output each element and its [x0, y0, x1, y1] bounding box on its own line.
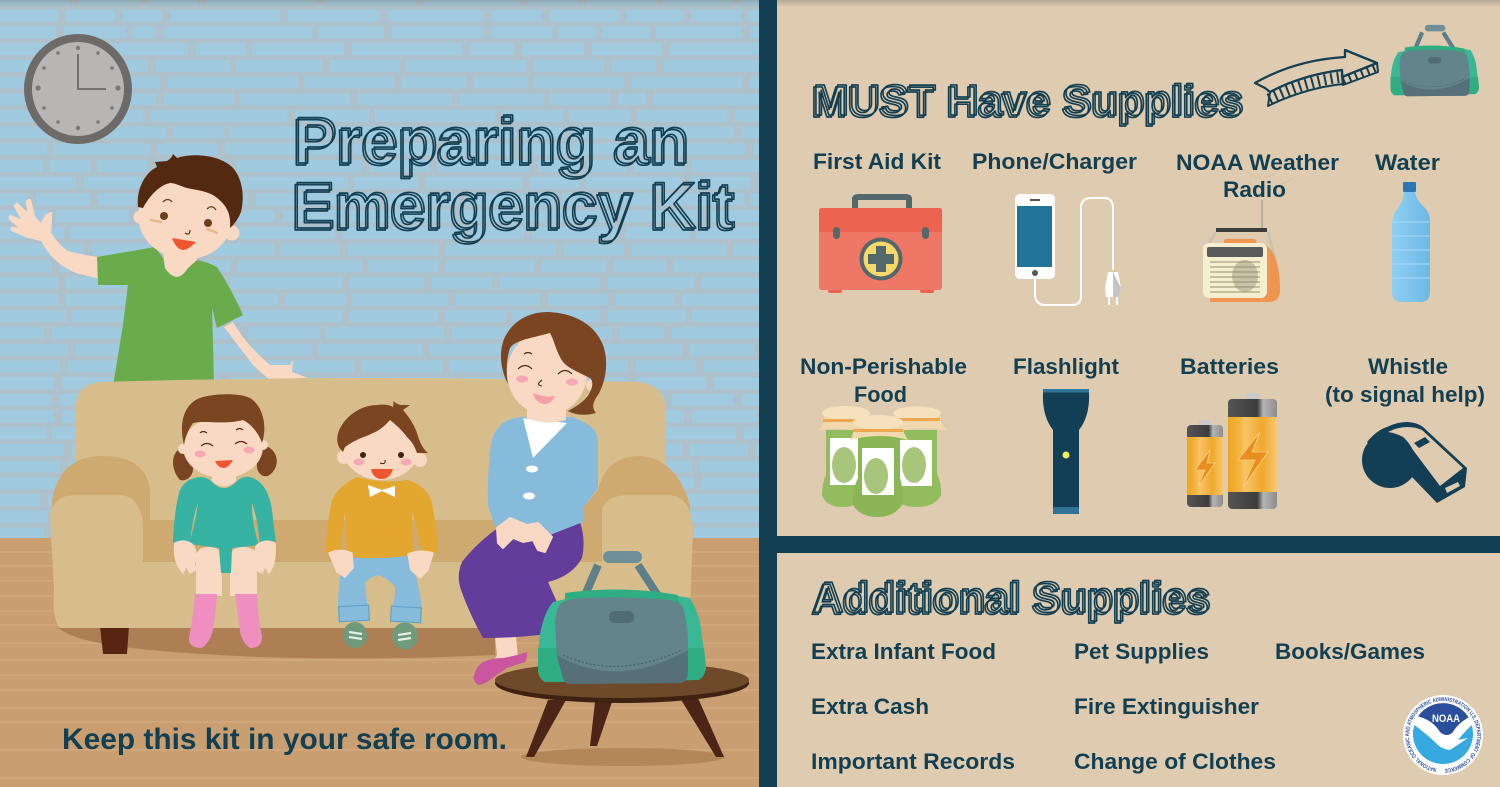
icon: small bag [1391, 25, 1479, 96]
icon: emergency kit bag on table [538, 551, 706, 684]
item: NOAA weather radio: NOAA Weather [1176, 150, 1339, 175]
item: NOAA weather radio: Radio [1223, 177, 1286, 202]
arrow to bag [1255, 50, 1378, 106]
character: standing boy [10, 154, 308, 386]
panel: additional supplies [811, 573, 1483, 775]
list: additional items: Books/Games [1275, 639, 1425, 664]
item: first aid kit [813, 149, 942, 293]
heading: additional supplies: Additional Supplies [813, 573, 1211, 622]
small battery [1187, 420, 1223, 507]
sofa [50, 378, 693, 659]
character: small boy [325, 401, 438, 650]
item: non-perishable food [800, 354, 967, 517]
item: flashlight [1013, 354, 1120, 514]
item: phone and charger [972, 149, 1137, 305]
center jar [850, 415, 908, 517]
heading: must have supplies: MUST Have Supplies [813, 76, 1244, 125]
item: non-perishable food: Non-Perishable [800, 354, 967, 379]
logo: NOAA: NATIONAL OCEANIC AND ATMOSPHERIC ADMINISTRATION U.S. DEPARTMENT OF COMMERCE [1405, 697, 1481, 773]
left jar [817, 406, 870, 507]
icon: wall clock [24, 34, 132, 144]
item: non-perishable food: Food [854, 382, 907, 407]
coffee table [495, 662, 749, 766]
item: phone and charger: Phone/Charger [972, 149, 1137, 174]
list: additional items: Important Records [811, 749, 1015, 774]
item: whistle [1325, 354, 1485, 503]
item: NOAA weather radio [1176, 150, 1339, 302]
title [293, 103, 735, 242]
list: additional items: Extra Infant Food [811, 639, 996, 664]
character: mother [459, 312, 606, 685]
right jar [893, 406, 948, 507]
panel: dividers [759, 0, 1500, 787]
list: additional items: Change of Clothes [1074, 749, 1276, 774]
title: Emergency Kit [293, 168, 735, 242]
item: batteries: Batteries [1180, 354, 1279, 379]
item: first aid kit: First Aid Kit [813, 149, 942, 174]
character: girl [173, 394, 277, 648]
panel: left room scene [0, 0, 760, 787]
list: additional items: Pet Supplies [1074, 639, 1209, 664]
list: additional items: Fire Extinguisher [1074, 694, 1259, 719]
panel: must have supplies [777, 0, 1500, 536]
item: flashlight: Flashlight [1013, 354, 1120, 379]
item: whistle: (to signal help) [1325, 382, 1485, 407]
logo: NOAA: NOAA [1432, 713, 1460, 725]
item: batteries [1180, 354, 1279, 509]
wall background [0, 0, 760, 540]
large battery [1228, 393, 1277, 509]
item: water: Water [1375, 150, 1440, 175]
title: Preparing an [294, 103, 690, 177]
list: additional items: Extra Cash [811, 694, 929, 719]
item: whistle: Whistle [1368, 354, 1448, 379]
item: water [1375, 150, 1440, 302]
wood floor [0, 538, 760, 787]
caption: safe room: Keep this kit in your safe room. [62, 723, 507, 756]
list: additional items [811, 639, 1425, 774]
